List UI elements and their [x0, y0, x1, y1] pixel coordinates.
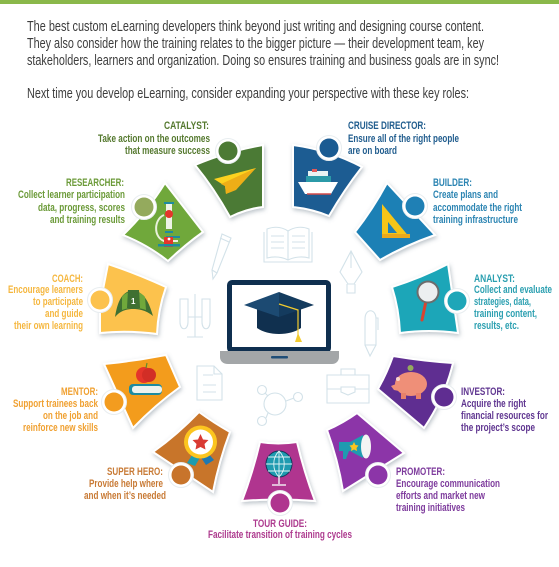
marker: investor — [432, 384, 456, 410]
panel: analyst — [392, 264, 470, 333]
icon: microscope — [156, 202, 180, 247]
icon: test tubes — [180, 294, 210, 337]
label: mentor: on the job and — [43, 410, 98, 422]
label: promoter: Encourage communication — [396, 478, 500, 490]
icon: pencil — [212, 234, 231, 279]
label: coach: COACH: — [52, 273, 83, 285]
label: promoter — [396, 466, 500, 514]
label: researcher: and training results — [50, 214, 125, 226]
label: coach: Encourage learners — [8, 284, 83, 296]
marker: super hero — [168, 462, 194, 488]
label: catalyst: that measure success — [125, 145, 210, 157]
panel: builder — [355, 183, 435, 260]
icon: pen — [365, 311, 378, 356]
icon: network nodes — [258, 386, 302, 426]
label: coach — [8, 273, 83, 332]
label: investor: the project’s scope — [461, 422, 535, 434]
label: mentor — [13, 386, 99, 434]
top green bar — [0, 0, 559, 4]
label: super hero: Provide help where — [89, 478, 163, 490]
panel: cruise director — [293, 136, 362, 216]
panel: super hero — [153, 412, 230, 492]
label: analyst: ANALYST: — [474, 273, 515, 285]
label: builder — [433, 177, 522, 226]
background line icons — [180, 227, 378, 426]
icon: piggy bank — [391, 365, 427, 399]
label: mentor: MENTOR: — [61, 386, 98, 398]
marker: coach — [88, 288, 112, 312]
label: tour guide: TOUR GUIDE: — [253, 518, 307, 530]
icon: megaphone — [339, 434, 371, 459]
graduation cap — [244, 292, 314, 342]
icon: pen nib — [340, 251, 362, 293]
label: cruise director: are on board — [348, 145, 397, 157]
label: catalyst — [98, 120, 210, 157]
marker: builder — [402, 194, 428, 218]
icon: set square — [382, 204, 410, 238]
label: super hero: and when it’s needed — [84, 490, 166, 502]
label: builder: BUILDER: — [433, 177, 472, 189]
label: cruise director: Ensure all of the right people — [348, 133, 459, 145]
icon: briefcase — [327, 369, 369, 403]
label: analyst: training content, — [474, 308, 537, 320]
marker: tour guide — [268, 490, 292, 516]
panel: catalyst — [195, 138, 263, 217]
laptop with graduation cap — [220, 280, 339, 364]
icon: apple and book — [129, 363, 162, 395]
label: researcher: RESEARCHER: — [66, 177, 124, 189]
label: builder: training infrastructure — [433, 214, 518, 226]
label: builder: accommodate the right — [433, 202, 522, 214]
label: coach: and guide — [45, 308, 83, 320]
label: analyst — [474, 273, 552, 332]
label: tour guide — [208, 518, 352, 541]
panel: tour guide — [242, 442, 315, 516]
marker: cruise director — [316, 136, 342, 160]
icon: paper plane — [214, 168, 256, 194]
marker: analyst — [444, 288, 470, 314]
label: super hero: SUPER HERO: — [107, 466, 163, 478]
label: researcher: data, progress, scores — [38, 202, 125, 214]
label: catalyst: Take action on the outcomes — [98, 133, 210, 145]
label: promoter: efforts and market new — [396, 490, 485, 502]
label: cruise director: CRUISE DIRECTOR: — [348, 120, 426, 132]
label: tour guide: Facilitate transition of training cycles — [208, 529, 352, 541]
marker: catalyst — [216, 138, 240, 164]
label: investor — [461, 386, 549, 434]
label: promoter: PROMOTER: — [396, 466, 445, 478]
marker: mentor — [102, 390, 126, 414]
panel: promoter — [327, 413, 404, 491]
label: cruise director — [348, 120, 459, 157]
intro text — [27, 19, 499, 102]
label: investor: Acquire the right — [461, 398, 526, 410]
icon: open book — [264, 227, 312, 262]
label: analyst: strategies, data, — [474, 296, 531, 308]
label: researcher: Collect learner participation — [18, 189, 125, 201]
marker: researcher — [132, 194, 156, 220]
label: super hero — [84, 466, 166, 502]
label: analyst: results, etc. — [474, 320, 519, 332]
label: builder: Create plans and — [433, 189, 498, 201]
laptop screen — [227, 280, 331, 353]
panel: coach — [88, 264, 166, 334]
icon: document — [197, 366, 222, 400]
label: mentor: Support trainees back — [13, 398, 99, 410]
label: promoter: training initiatives — [396, 502, 465, 514]
icon: magnifier — [418, 282, 438, 320]
label: investor: INVESTOR: — [461, 386, 505, 398]
panel: researcher — [123, 183, 203, 261]
laptop base — [220, 351, 339, 364]
marker: promoter — [366, 462, 390, 488]
label: mentor: reinforce new skills — [23, 422, 98, 434]
label: catalyst: CATALYST: — [164, 120, 209, 132]
label: coach: to participate — [33, 296, 83, 308]
icon: ship — [298, 169, 338, 194]
icon: medal — [184, 426, 217, 466]
icon: globe — [266, 451, 292, 485]
label: researcher — [18, 177, 125, 226]
label: coach: their own learning — [14, 320, 83, 332]
panel: investor — [378, 356, 456, 428]
icon: cap: 1 — [131, 297, 136, 306]
panel: mentor — [102, 355, 180, 428]
